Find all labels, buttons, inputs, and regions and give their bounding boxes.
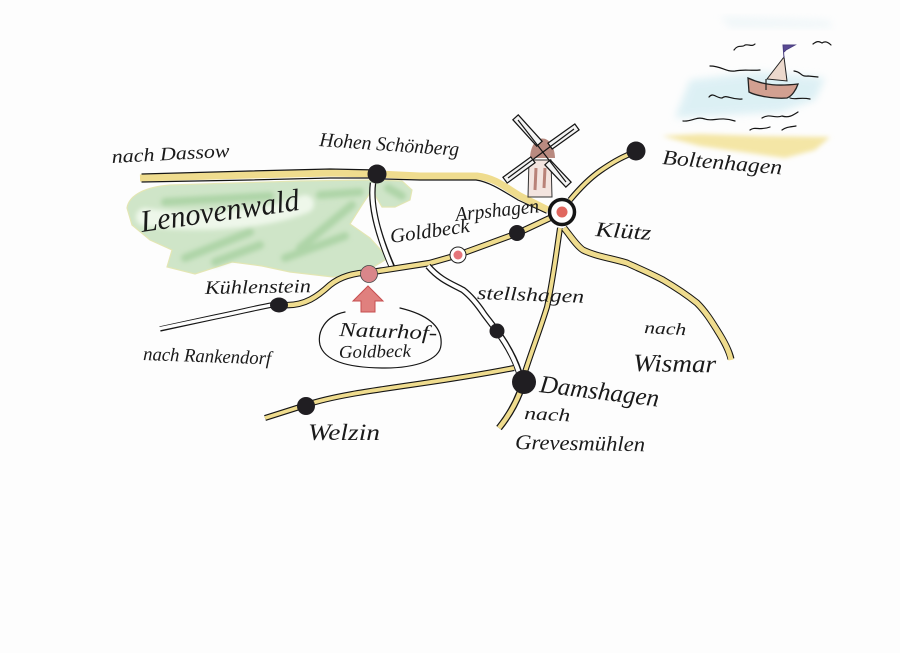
stop: Welzin xyxy=(297,397,315,415)
callout: Naturhof Goldbeck: Goldbeck xyxy=(339,341,412,362)
callout: Naturhof Goldbeck xyxy=(319,308,441,368)
road: nach Rankendorf to Kühlenstein xyxy=(158,305,272,329)
label: Lenovenwald: Lenovenwald xyxy=(137,182,302,239)
label: Boltenhagen: Boltenhagen xyxy=(662,145,783,179)
stop: Hohen Schönberg xyxy=(368,164,386,184)
road: Welzin to Damshagen xyxy=(265,368,514,418)
label: Wismar: Wismar xyxy=(633,350,717,378)
stop: Arpshagen centre xyxy=(556,206,568,218)
stop: Damshagen xyxy=(512,370,536,394)
road: Arpshagen to Boltenhagen xyxy=(570,154,630,200)
icon: windmill xyxy=(508,120,574,197)
stop: Arpshagen small xyxy=(509,225,525,241)
sea and beach background xyxy=(662,16,832,158)
label: Klütz: Klütz xyxy=(593,217,652,245)
panel: forest Lenovenwald xyxy=(127,180,412,277)
stop: Arpshagen main xyxy=(550,200,574,224)
stop: small Goldbeck junction xyxy=(450,247,466,263)
road: Klütz to Wismar xyxy=(564,228,731,360)
road: nach Dassow over Hohen Schönberg to Arpshagen xyxy=(140,169,548,213)
label: nach (Grevesmühlen): nach xyxy=(524,403,571,425)
road: Kühlenstein to Arpshagen xyxy=(285,218,550,305)
waves and seagulls xyxy=(683,42,831,130)
stop: Kühlenstein xyxy=(270,298,288,312)
arrow: to Naturhof xyxy=(353,286,383,312)
stop: Boltenhagen road end xyxy=(626,142,646,160)
road: Goldbeck to Stellshagen and Damshagen xyxy=(428,266,519,373)
road: Hohen Schönberg to Goldbeck xyxy=(372,183,392,268)
stop: Stellshagen xyxy=(490,324,504,338)
label: Kühlenstein: Kühlenstein xyxy=(204,276,311,299)
label: nach (Wismar): nach xyxy=(644,318,687,339)
label: Welzin: Welzin xyxy=(308,420,380,445)
label: Hohen Schönberg: Hohen Schönberg xyxy=(318,129,460,161)
label: Goldbeck: Goldbeck xyxy=(389,215,472,248)
label: Damshagen: Damshagen xyxy=(537,371,661,413)
label: Arpshagen: Arpshagen xyxy=(452,195,540,226)
icon: sailing boat xyxy=(748,45,798,98)
label: nach Dassow: nach Dassow xyxy=(111,141,230,168)
callout: Naturhof Goldbeck: Naturhof- xyxy=(338,319,438,344)
label: Stellshagen: stellshagen xyxy=(477,283,584,308)
label: nach Rankendorf: nach Rankendorf xyxy=(143,344,274,370)
stop: Goldbeck xyxy=(360,266,378,282)
label: Grevesmühlen: Grevesmühlen xyxy=(515,430,645,456)
road: Arpshagen to Damshagen and Grevesmühlen xyxy=(499,228,560,428)
